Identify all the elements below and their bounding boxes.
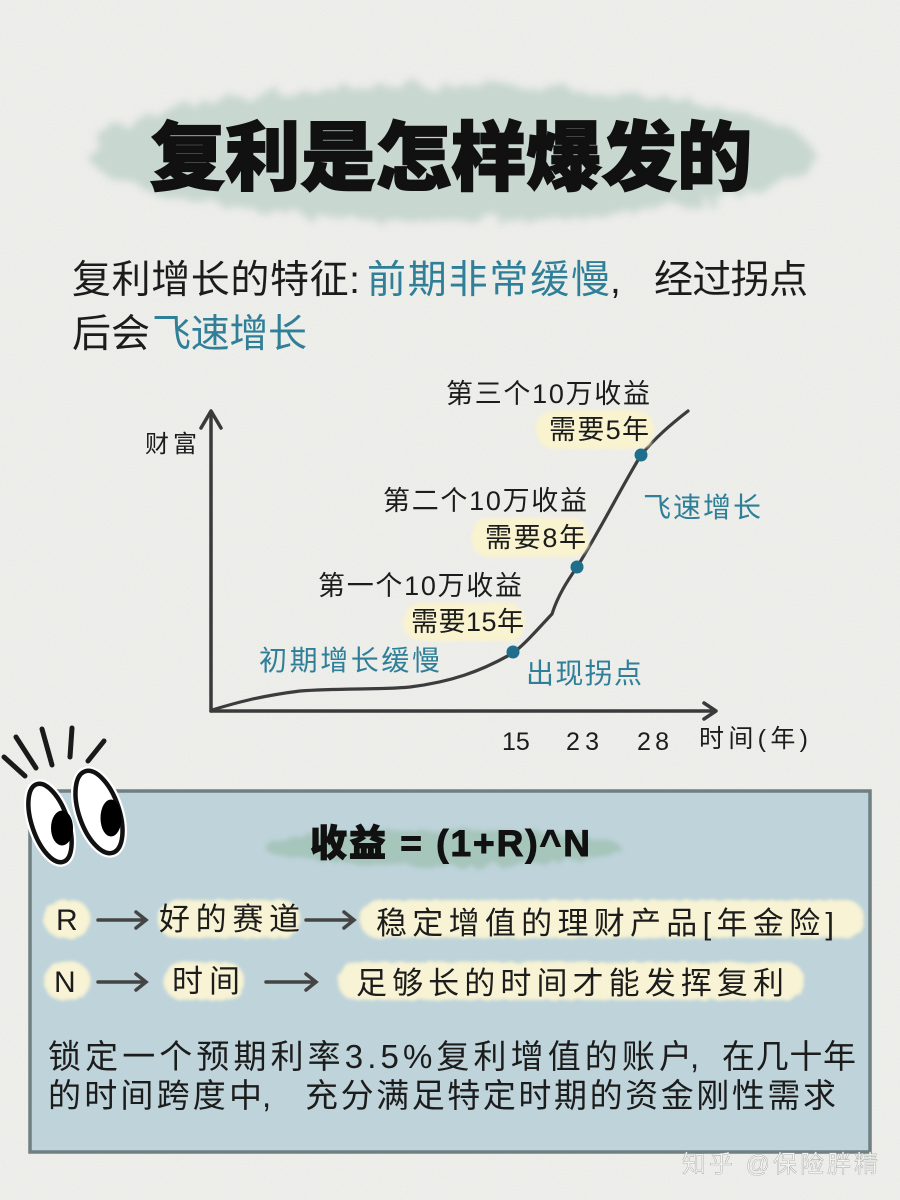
panel body text: ,: [262, 1077, 271, 1114]
teal annotations: 出现拐点: [526, 658, 642, 689]
teal annotations: [259, 492, 761, 689]
row N: N: [54, 966, 76, 999]
intro text: [72, 259, 808, 356]
intro text: ,: [610, 259, 621, 302]
milestone 2: 需要8年: [485, 523, 586, 553]
intro text: 前期非常缓慢: [367, 259, 610, 302]
milestone 2: [383, 486, 587, 553]
arrow: [266, 974, 316, 990]
curve points: [506, 448, 648, 658]
y axis label: 财富: [145, 431, 197, 458]
intro text: 经过拐点: [654, 259, 808, 302]
watermark: 知乎 @保险胖精: [682, 1151, 878, 1178]
icon: cartoon eyes: [4, 728, 132, 868]
growth curve: [212, 411, 688, 710]
panel body text: 锁定一个预期利率3.5%复利增值的账户: [48, 1038, 692, 1075]
milestone 1: 第一个10万收益: [318, 571, 522, 601]
milestone 3: 第三个10万收益: [446, 379, 650, 409]
title: 复利是怎样爆发的: [150, 116, 752, 200]
row R: 稳定增值的理财产品[年金险]: [376, 906, 834, 941]
row R: 好的赛道: [159, 902, 300, 937]
milestone 3: 需要5年: [549, 415, 649, 445]
row N: [54, 964, 784, 1001]
growth chart: [145, 379, 808, 756]
row R: [56, 902, 834, 941]
panel body text: ,: [690, 1038, 699, 1075]
formula highlight: [265, 830, 621, 866]
row N: 足够长的时间才能发挥复利: [356, 966, 784, 1001]
axes: [201, 411, 716, 719]
row R: R: [56, 904, 78, 937]
left eye: [20, 778, 80, 868]
burst lines: [4, 728, 104, 776]
teal annotations: 初期增长缓慢: [259, 645, 440, 676]
intro text: 后会: [72, 313, 150, 356]
milestone 2: 第二个10万收益: [383, 486, 587, 516]
right eye: [66, 765, 132, 859]
x axis labels: [502, 725, 808, 756]
milestone 1: [318, 571, 524, 637]
arrow: [98, 912, 146, 928]
title brush highlight: [88, 85, 812, 221]
milestone 1: 需要15年: [411, 607, 524, 637]
panel body text: 充分满足特定时期的资金刚性需求: [305, 1077, 836, 1114]
x axis labels: 23: [566, 728, 599, 756]
highlights: [403, 410, 654, 641]
arrow: [306, 912, 354, 928]
milestone 3: [446, 379, 650, 445]
intro text: 飞速增长: [152, 313, 307, 356]
intro text: 复利增长的特征:: [72, 259, 360, 302]
panel body text: [48, 1038, 856, 1114]
formula: 收益 = (1+R)^N: [310, 823, 590, 864]
x axis labels: 28: [637, 728, 669, 756]
x axis labels: 15: [502, 728, 530, 756]
formula panel: [30, 791, 870, 1152]
row N: 时间: [172, 964, 240, 999]
teal annotations: 飞速增长: [643, 492, 761, 523]
row highlights: [44, 900, 864, 1000]
panel body text: 的时间跨度中: [48, 1077, 262, 1114]
x axis labels: 时间(年): [699, 725, 808, 753]
panel body text: 在几十年: [722, 1038, 856, 1075]
arrow: [98, 974, 146, 990]
